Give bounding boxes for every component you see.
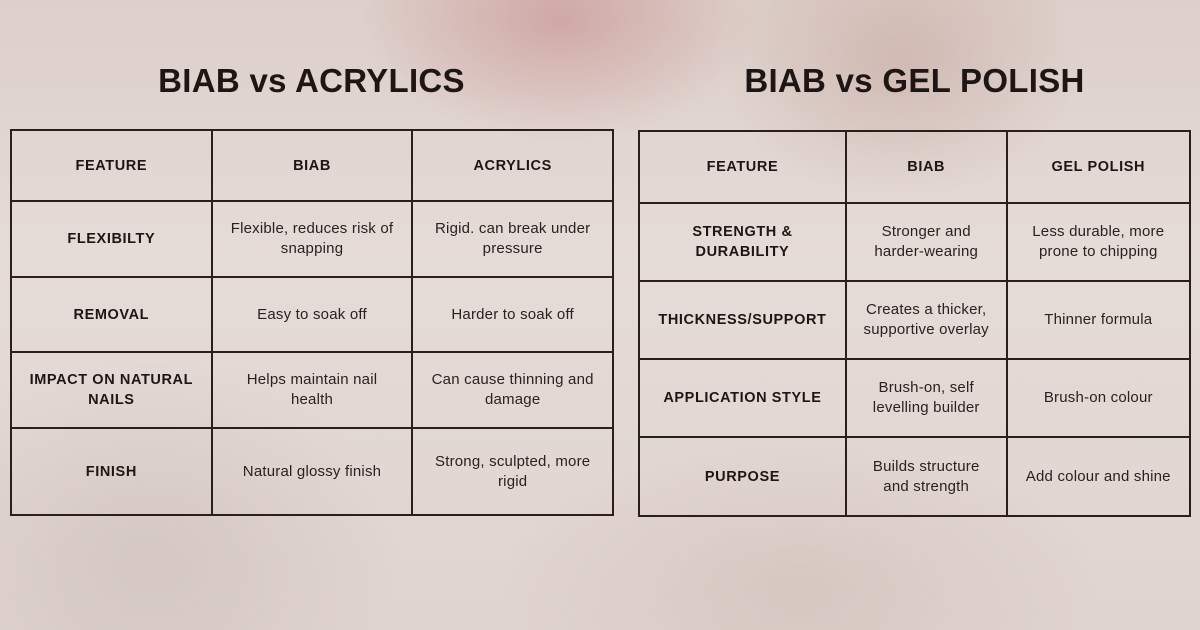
table: BIAB vs Acrylics: Strong, sculpted, more rigid: [435, 452, 590, 490]
table: BIAB vs Acrylics: FINISH: [86, 464, 137, 480]
table: BIAB vs Gel Polish: Brush-on, self levelling builder: [873, 379, 980, 416]
table: BIAB vs Gel Polish: APPLICATION STYLE: [663, 390, 822, 406]
table: BIAB vs Acrylics: Flexible, reduces risk of snapping: [231, 220, 393, 257]
table: BIAB vs Gel Polish: Builds structure and strength: [873, 458, 979, 494]
table: BIAB vs Gel Polish: Brush-on colour: [1044, 389, 1153, 406]
table: BIAB vs Gel Polish: BIAB: [907, 159, 945, 175]
table: BIAB vs Acrylics: Natural glossy finish: [243, 462, 381, 480]
table: BIAB vs Acrylics: Rigid. can break under pressure: [435, 220, 590, 257]
table: BIAB vs Gel Polish: PURPOSE: [705, 468, 780, 484]
table: BIAB vs Gel Polish: FEATURE: [707, 159, 778, 175]
table: BIAB vs Acrylics: BIAB: [293, 158, 331, 174]
table: BIAB vs Gel Polish: THICKNESS/SUPPORT: [658, 312, 826, 328]
table: BIAB vs Gel Polish: Less durable, more prone to chipping: [1032, 223, 1164, 260]
table: BIAB vs Gel Polish: STRENGTH &: [692, 224, 793, 240]
table: BIAB vs Gel Polish: Thinner formula: [1044, 311, 1152, 328]
table: BIAB vs Acrylics: REMOVAL: [74, 306, 149, 322]
table: BIAB vs Acrylics: Helps maintain nail health: [247, 371, 377, 408]
title: BIAB vs ACRYLICS: BIAB vs ACRYLICS: [158, 62, 465, 99]
table: BIAB vs Gel Polish: [638, 130, 1191, 517]
table: BIAB vs Acrylics: Easy to soak off: [257, 306, 367, 322]
table: BIAB vs Gel Polish: Add colour and shine: [1026, 468, 1171, 484]
table: BIAB vs Gel Polish: DURABILITY: [696, 244, 789, 260]
table: BIAB vs Gel Polish: Creates a thicker, supportive overlay: [864, 301, 989, 338]
table: BIAB vs Acrylics: ACRYLICS: [473, 158, 552, 174]
table: BIAB vs Acrylics: IMPACT ON NATURAL NAILS: [30, 372, 193, 408]
table: BIAB vs Gel Polish: GEL POLISH: [1051, 159, 1145, 175]
table: BIAB vs Acrylics: FEATURE: [76, 158, 147, 174]
table: BIAB vs Acrylics: [10, 129, 614, 516]
table: BIAB vs Gel Polish: Stronger and harder-wearing: [874, 223, 978, 260]
table: BIAB vs Acrylics: FLEXIBILTY: [67, 231, 155, 247]
table: BIAB vs Acrylics: Harder to soak off: [451, 306, 574, 322]
table: BIAB vs Acrylics: Can cause thinning and damage: [432, 371, 594, 408]
title: BIAB vs GEL POLISH: BIAB vs GEL POLISH: [744, 62, 1085, 99]
